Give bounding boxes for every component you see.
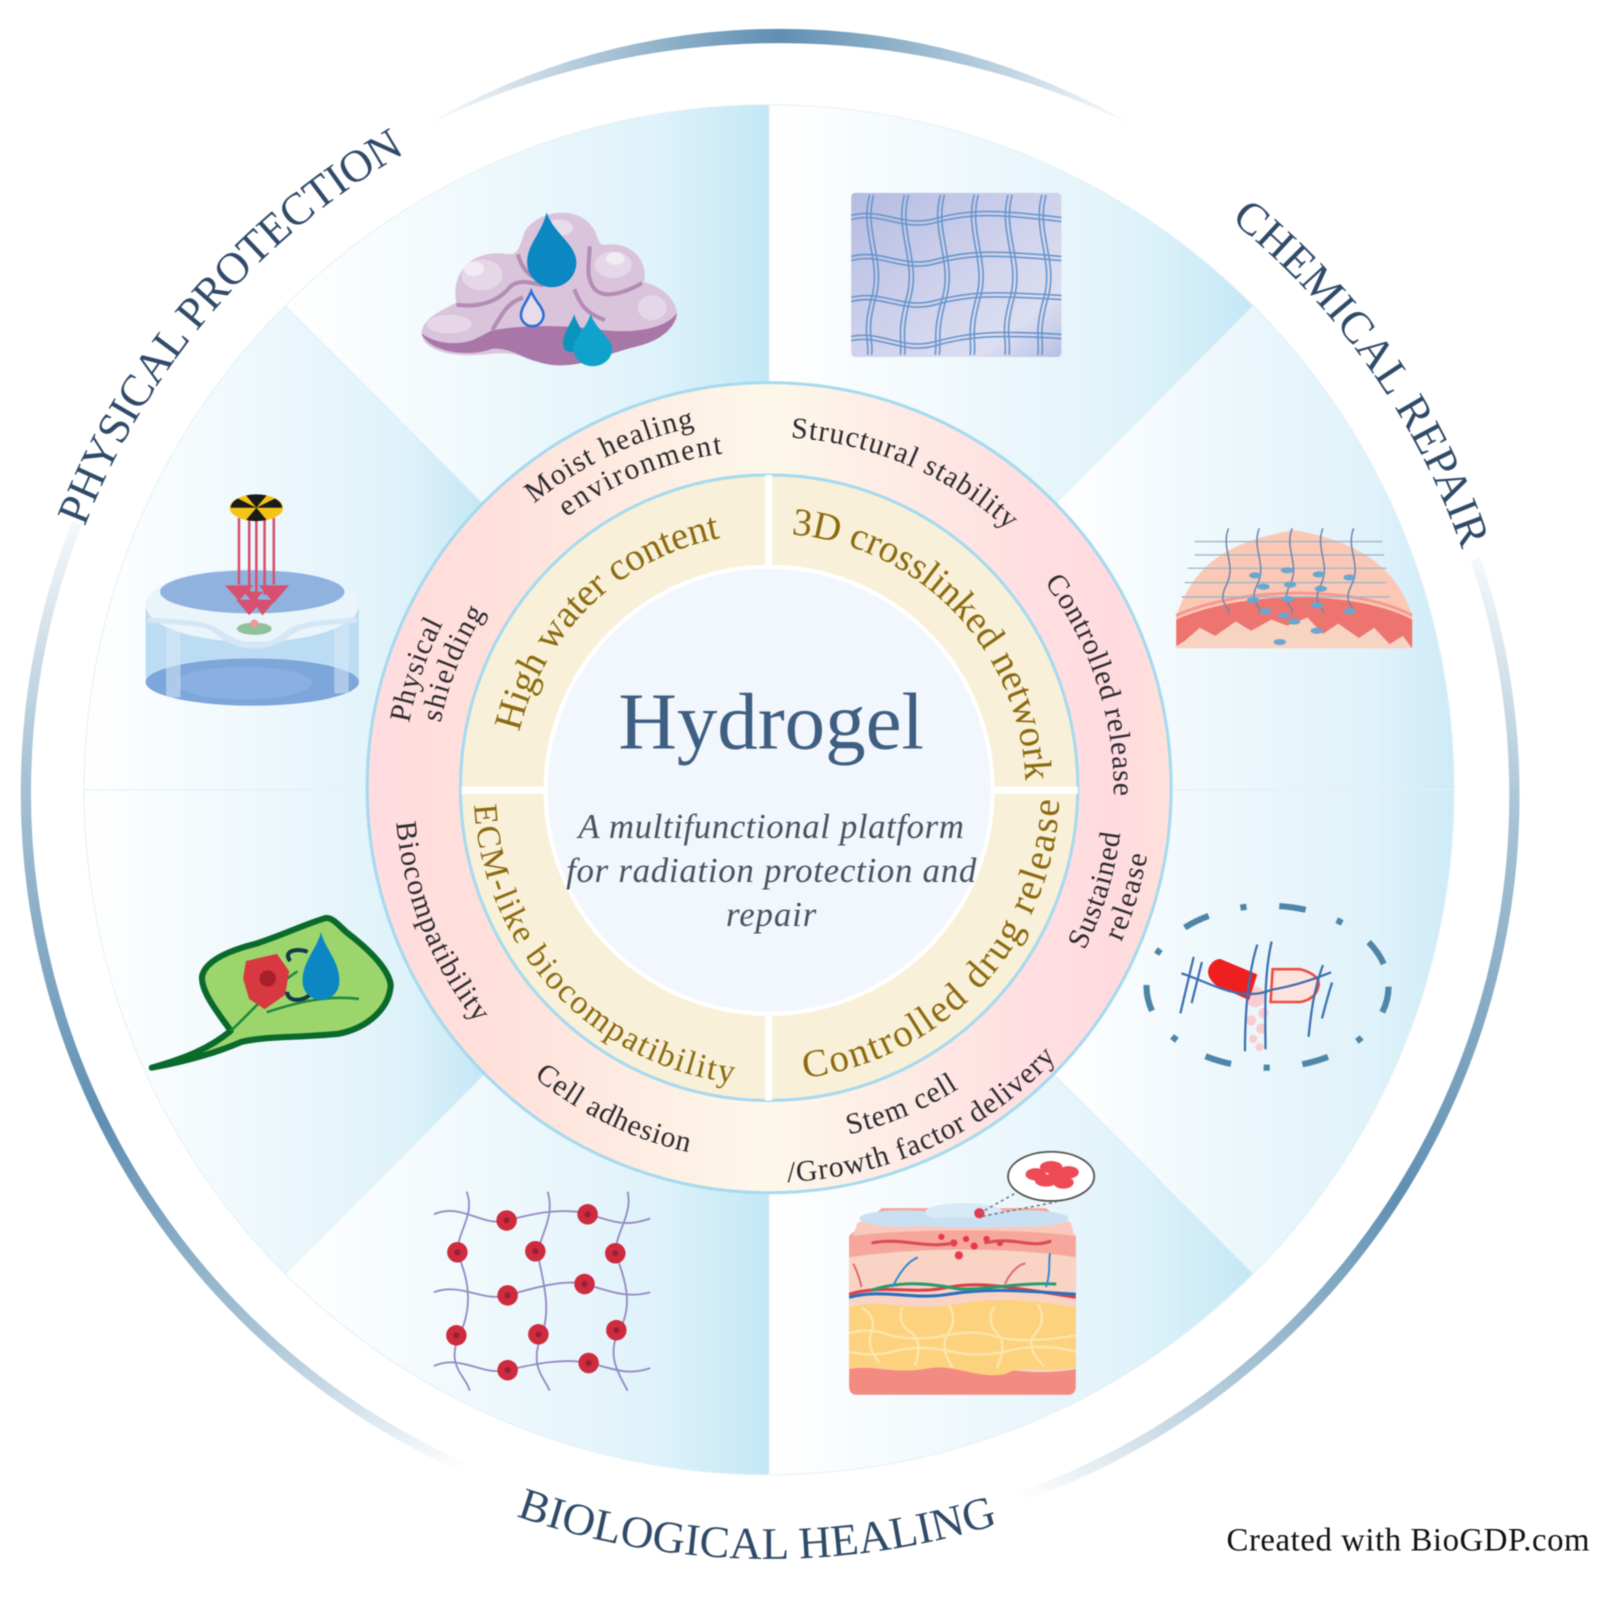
heading: PHYSICAL PROTECTION: PHYSICAL PROTECTION bbox=[57, 128, 402, 526]
text block: subtitle: A multifunctional platform bbox=[576, 807, 964, 846]
label: 3D crosslinked network: 3D crosslinked network bbox=[792, 508, 1052, 782]
panel: eight gradient wedges bbox=[84, 105, 1454, 1475]
label: Controlled release: Controlled release bbox=[1048, 574, 1132, 796]
icon: crosslinked mesh sheet bbox=[851, 193, 1061, 357]
label: Physical shielding: Physical bbox=[390, 616, 444, 723]
label: Sustained release bbox=[1068, 832, 1148, 949]
label: ECM-like biocompatibility: ECM-like biocompatibility bbox=[473, 804, 736, 1089]
label: Stem cell / Growth factor delivery: /Growth factor delivery bbox=[787, 1048, 1054, 1184]
panel: middle ring of functions bbox=[367, 383, 1171, 1193]
text block: subtitle bbox=[566, 807, 977, 934]
label: Sustained release: Sustained bbox=[1068, 832, 1121, 949]
icon: capsule drug release in dashed ellipse bbox=[1147, 906, 1389, 1068]
icon: leaf with cell adhesion and water drop bbox=[152, 918, 391, 1068]
text block: subtitle: repair bbox=[726, 895, 817, 934]
heading: CHEMICAL REPAIR: CHEMICAL REPAIR bbox=[1236, 202, 1486, 550]
heading: BIOLOGICAL HEALING: BIOLOGICAL HEALING bbox=[516, 1488, 994, 1560]
icon: skin with hydrogel network bbox=[1176, 528, 1412, 648]
icon: polymer network with adhered red cells bbox=[434, 1192, 650, 1391]
text block: subtitle: for radiation protection and bbox=[566, 851, 977, 890]
title: Hydrogel: Hydrogel bbox=[618, 677, 924, 767]
icon: hydrogel cloud with water drops bbox=[421, 212, 677, 366]
label: Cell adhesion: Cell adhesion bbox=[538, 1065, 690, 1153]
label: Biocompatibility: Biocompatibility bbox=[396, 820, 488, 1020]
label: Controlled drug release: Controlled drug release bbox=[802, 800, 1060, 1078]
label: Physical shielding bbox=[390, 605, 488, 723]
icon: layered skin cross-section with magnified cells bbox=[849, 1152, 1094, 1395]
label: Physical shielding: shielding bbox=[422, 605, 488, 722]
label: High water content: High water content bbox=[494, 517, 721, 732]
panel: inner ring of properties bbox=[460, 475, 1078, 1100]
label: Moist healing environment: environment bbox=[560, 436, 723, 516]
label: Moist healing environment: Moist healing bbox=[522, 412, 696, 504]
credit text: Created with BioGDP.com bbox=[1227, 1523, 1590, 1559]
label: Stem cell / Growth factor delivery: Stem cell bbox=[846, 1072, 959, 1134]
label: Structural stability: Structural stability bbox=[792, 418, 1018, 529]
label: Sustained release: release bbox=[1108, 854, 1148, 942]
icon: radiation shield cylinder bbox=[146, 494, 359, 706]
panel: center disc bbox=[546, 567, 993, 1014]
